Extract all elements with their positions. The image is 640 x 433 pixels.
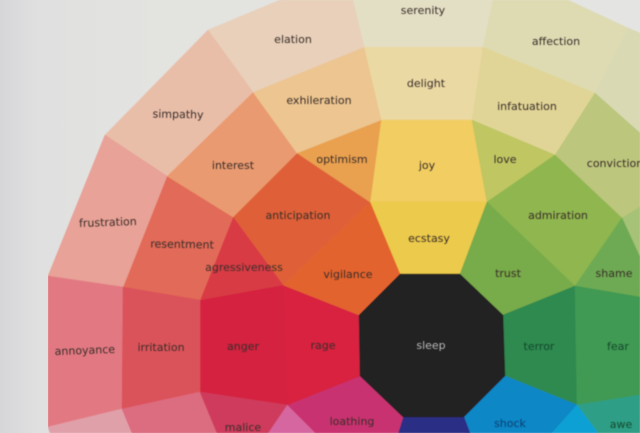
labels: loathing <box>330 415 374 428</box>
labels: optimism <box>316 153 368 166</box>
labels: anticipation <box>266 209 331 222</box>
labels: elation <box>274 33 312 46</box>
labels: awe <box>610 418 632 431</box>
labels: terror <box>524 340 555 353</box>
labels: shame <box>596 267 633 280</box>
labels: love <box>493 153 517 166</box>
labels: sleep <box>416 339 446 352</box>
labels: irritation <box>137 341 185 354</box>
labels: serenity <box>401 4 446 17</box>
labels: agressiveness <box>205 261 283 274</box>
labels: affection <box>532 35 580 48</box>
labels: simpathy <box>152 108 204 121</box>
labels: joy <box>418 159 436 172</box>
labels: fear <box>607 340 629 353</box>
labels: anger <box>227 340 259 353</box>
labels: interest <box>212 159 255 172</box>
labels: ecstasy <box>408 232 450 245</box>
labels: annoyance <box>54 343 116 358</box>
labels: admiration <box>528 209 588 222</box>
labels: exhileration <box>286 94 352 107</box>
labels: vigilance <box>323 268 373 281</box>
labels: infatuation <box>497 100 557 113</box>
labels: rage <box>310 339 336 352</box>
labels: delight <box>407 77 446 90</box>
labels: trust <box>495 267 522 280</box>
labels: frustration <box>79 215 137 230</box>
labels: shock <box>494 417 527 430</box>
labels: resentment <box>150 237 215 252</box>
